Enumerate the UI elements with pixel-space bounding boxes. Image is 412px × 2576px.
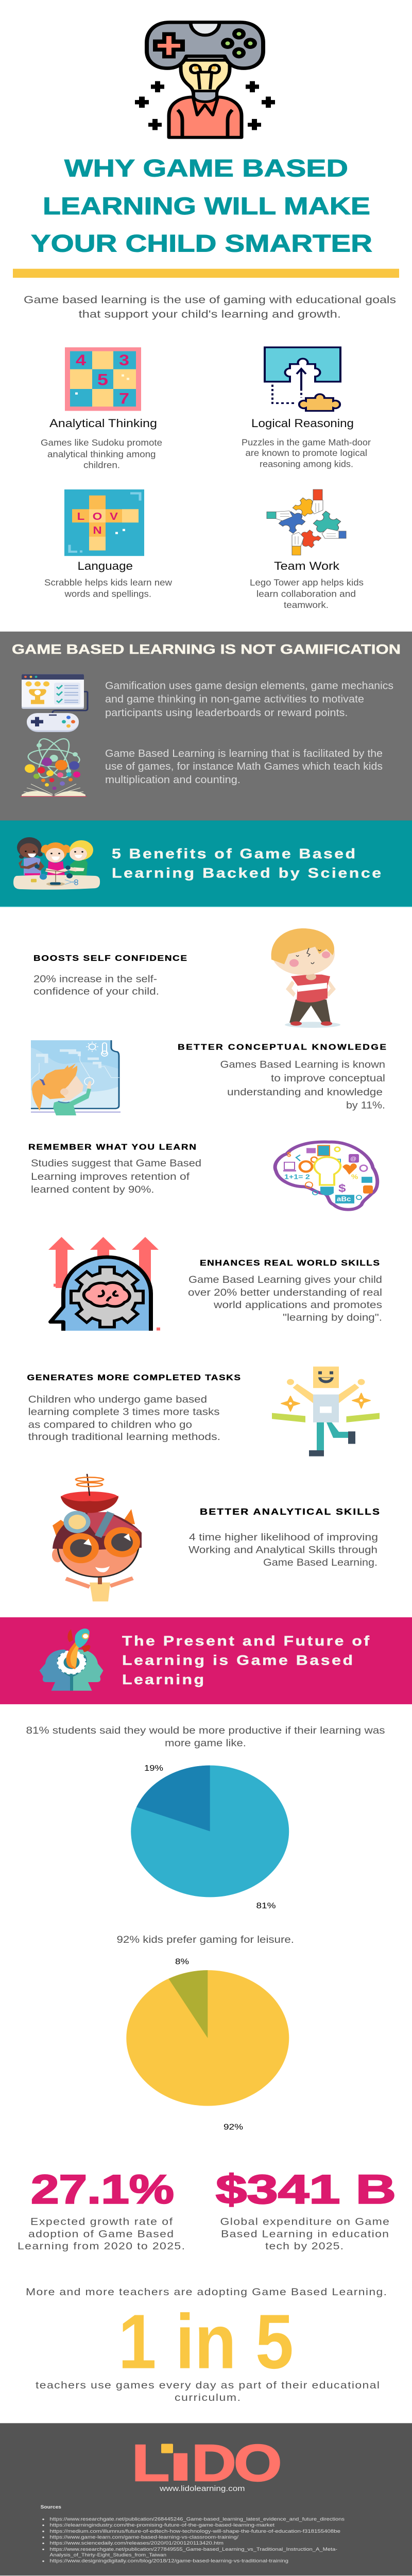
- icon: scrabble board: [64, 489, 144, 556]
- illustration: kid with goggles and propeller hat: [52, 1474, 142, 1601]
- sources list: https://www.researchgate.net/publication/277849555_Game-based_Learning_vs_Traditional_Instruction_A_Meta-: [49, 2547, 337, 2552]
- icon: atom over open book: [21, 735, 87, 797]
- illustration: confident boy: [271, 928, 340, 1028]
- icon: controller-headed lightbulb person: [135, 22, 275, 138]
- banner heading: [122, 1634, 369, 1688]
- benefit: boosts self confidence: [33, 928, 340, 1028]
- game based learning description: [105, 748, 383, 786]
- pie chart: 92 / 8: 92%: [224, 2123, 243, 2131]
- skill: analytical thinking: [41, 347, 162, 470]
- logo: LiDO: O: [234, 2434, 282, 2492]
- icon: scrabble board: N: [93, 524, 102, 536]
- skill: team work: Lego Tower app helps kids: [250, 578, 364, 588]
- skill: logical reasoning: Logical Reasoning: [251, 417, 354, 430]
- benefit: generates more completed tasks: GENERATES MORE COMPLETED TASKS: [27, 1373, 241, 1382]
- logo: LiDO: D: [192, 2434, 236, 2492]
- icon: scrabble board: V: [110, 511, 118, 522]
- title: [31, 155, 372, 257]
- benefit: generates more completed tasks: learning complete 3 times more tasks: [28, 1406, 220, 1417]
- intro text: that support your child's learning and growth.: [79, 309, 341, 320]
- icon: sudoku grid: 3: [119, 352, 129, 369]
- stat: global expenditure: [216, 2166, 396, 2252]
- illustration: brain of icons: [275, 1142, 377, 1210]
- intro text: Game based learning is the use of gaming with educational goals: [24, 294, 396, 306]
- panel: future of learning banner: [0, 1617, 412, 1704]
- stat: global expenditure: Based Learning in education: [221, 2229, 389, 2240]
- skill: team work: [250, 489, 364, 611]
- illustration: brain of icons: 1+1= 2: [284, 1173, 310, 1181]
- benefit: boosts self confidence: confidence of your child.: [33, 986, 159, 997]
- skill: logical reasoning: are known to promote logical: [245, 448, 367, 459]
- text: productivity statistic: more game like.: [165, 1738, 246, 1749]
- text: productivity statistic: [26, 1725, 385, 1749]
- benefit: generates more completed tasks: [27, 1366, 380, 1456]
- benefit: boosts self confidence: BOOSTS SELF CONFIDENCE: [33, 954, 187, 963]
- benefit: remember what you learn: [28, 1142, 377, 1210]
- text: teachers use games: curriculum.: [175, 2393, 241, 2403]
- skill: logical reasoning: reasoning among kids.: [260, 459, 353, 469]
- illustration: brain of icons: aBc: [337, 1196, 351, 1202]
- banner heading: Learning is Game Based: [122, 1653, 353, 1668]
- banner heading: The Present and Future of: [122, 1634, 369, 1649]
- text: productivity statistic: 81% students said they would be more productive if their learning was: [26, 1725, 385, 1736]
- benefit: better conceptual knowledge: BETTER CONCEPTUAL KNOWLEDGE: [178, 1042, 386, 1052]
- stat: global expenditure: Global expenditure on Game: [220, 2216, 389, 2227]
- benefit: enhances real world skills: "learning by doing".: [283, 1312, 382, 1323]
- text: teachers use games: teachers use games every day as part of their educational: [36, 2380, 380, 2391]
- pie chart: 81 / 19: 19%: [144, 1764, 163, 1773]
- game based learning description: multiplication and counting.: [105, 774, 241, 786]
- pie chart: 92 / 8: [126, 1957, 289, 2131]
- intro text: [24, 294, 396, 320]
- logo: LiDO: L: [132, 2434, 169, 2492]
- icon: puzzle door: [265, 347, 340, 411]
- illustration: head with gear and rising arrows: [48, 1237, 160, 1331]
- icon: scrabble board: O: [93, 511, 102, 522]
- benefit: better conceptual knowledge: [31, 1040, 386, 1115]
- skill: logical reasoning: Puzzles in the game Math-door: [242, 437, 371, 448]
- benefit: better analytical skills: [52, 1474, 380, 1601]
- stat: growth rate: adoption of Game Based: [28, 2229, 174, 2240]
- skill: logical reasoning: [242, 347, 371, 469]
- panel: footer: [0, 2423, 412, 2575]
- panel: benefits banner: [0, 820, 412, 907]
- stat: growth rate: [18, 2166, 185, 2252]
- website url: www.lidolearning.com: [159, 2484, 245, 2493]
- illustration: happy block figure: [272, 1366, 380, 1456]
- benefit: better analytical skills: 4 time higher likelihood of improving: [189, 1532, 378, 1543]
- benefit: enhances real world skills: [48, 1237, 382, 1331]
- skill: language: Scrabble helps kids learn new: [44, 578, 173, 588]
- gamification description: and game thinking in non-game activities to motivate: [105, 693, 364, 705]
- benefit: better conceptual knowledge: by 11%.: [346, 1100, 385, 1111]
- logo: LiDO: [132, 2434, 282, 2492]
- skill: analytical thinking: Games like Sudoku promote: [41, 438, 162, 448]
- yellow divider bar: [13, 269, 399, 278]
- benefit: generates more completed tasks: through traditional learning methods.: [28, 1432, 220, 1443]
- stat: growth rate: 27.1%: [31, 2166, 174, 2212]
- gamification description: participants using leaderboards or reward points.: [105, 707, 348, 719]
- sources list: https://www.sciencedaily.com/releases/2020/01/200120113420.htm: [49, 2541, 224, 2546]
- illustration: girl at touch screen: [31, 1040, 121, 1115]
- benefit: better analytical skills: Game Based Learning.: [263, 1557, 377, 1568]
- illustration: brain of icons: $: [287, 1151, 291, 1158]
- benefit: enhances real world skills: Game Based Learning gives your child: [188, 1275, 382, 1285]
- benefit: enhances real world skills: over 20% better understanding of real: [188, 1287, 382, 1298]
- benefit: generates more completed tasks: Children who undergo game based: [28, 1394, 207, 1405]
- stat: growth rate: Learning from 2020 to 2025.: [18, 2241, 185, 2252]
- text: teachers adopting: More and more teachers are adopting Game Based Learning.: [26, 2287, 387, 2298]
- stat: global expenditure: tech by 2025.: [265, 2241, 344, 2252]
- benefit: generates more completed tasks: as compared to children who go: [28, 1419, 192, 1430]
- skill: language: words and spellings.: [64, 589, 151, 599]
- stat: global expenditure: $341 B: [216, 2166, 396, 2212]
- game based learning description: Game Based Learning is learning that is facilitated by the: [105, 748, 383, 759]
- benefit: remember what you learn: learned content by 90%.: [31, 1184, 154, 1195]
- banner heading: [112, 846, 381, 881]
- skill: language: Language: [77, 560, 133, 572]
- benefit: remember what you learn: Studies suggest that Game Based: [31, 1158, 201, 1169]
- skill: language: [44, 489, 173, 599]
- game based learning description: use of games, for instance Math Games which teach kids: [105, 760, 383, 772]
- icon: scrabble board: L: [77, 511, 84, 522]
- stat: growth rate: Expected growth rate of: [30, 2216, 173, 2227]
- sources list: [41, 2504, 345, 2564]
- title: LEARNING WILL MAKE: [43, 193, 370, 220]
- title: WHY GAME BASED: [64, 155, 348, 182]
- benefit: enhances real world skills: ENHANCES REAL WORLD SKILLS: [200, 1258, 380, 1267]
- icon: sudoku grid: 5: [97, 370, 108, 389]
- sources list: https://www.designingdigitally.com/blog/2018/12/game-based-learning-vs-traditional-training: [49, 2559, 288, 2564]
- skill: team work: Team Work: [274, 560, 340, 572]
- pie chart: 81 / 19: [131, 1764, 289, 1910]
- pie chart: 81 / 19: 81%: [256, 1902, 276, 1910]
- sources list: Analysis_of_Thirty-Eight_Studies_from_Taiwan: [49, 2553, 166, 2558]
- benefit: enhances real world skills: world applications and promotes: [213, 1300, 382, 1311]
- banner heading: Learning: [122, 1672, 204, 1688]
- benefit: boosts self confidence: 20% increase in the self-: [33, 974, 157, 985]
- stat: one in five: 1 in 5: [118, 2299, 294, 2385]
- sources list: https://www.researchgate.net/publication/268445246_Game-based_learning_latest_evidence_and_future_directions: [49, 2517, 345, 2522]
- title: YOUR CHILD SMARTER: [31, 230, 372, 257]
- benefit: remember what you learn: Learning improves retention of: [31, 1172, 190, 1182]
- benefit: better analytical skills: Working and Analytical Skills through: [188, 1545, 377, 1555]
- text: teachers use games: [36, 2380, 380, 2403]
- banner heading: Learning Backed by Science: [112, 866, 381, 881]
- benefit: better conceptual knowledge: Games Based Learning is known: [220, 1059, 385, 1070]
- icon: leaderboard window and controller: [22, 674, 88, 732]
- illustration: brain of icons: @: [350, 1156, 356, 1162]
- gamification description: [105, 680, 393, 719]
- illustration: brain of icons: %: [351, 1173, 358, 1180]
- benefit: better conceptual knowledge: understanding and knowledge: [227, 1087, 383, 1097]
- panel: not gamification: [0, 632, 412, 820]
- skill: team work: learn collaboration and: [256, 589, 356, 599]
- benefit: better analytical skills: BETTER ANALYTICAL SKILLS: [200, 1507, 380, 1517]
- benefit: better conceptual knowledge: to improve conceptual: [271, 1073, 385, 1084]
- pie chart: 92 / 8: 8%: [175, 1957, 189, 1966]
- benefit: remember what you learn: REMEMBER WHAT YOU LEARN: [28, 1142, 196, 1151]
- skill: analytical thinking: analytical thinking among: [47, 449, 156, 460]
- sources list: Sources: [41, 2504, 61, 2510]
- icon: sudoku grid: 4: [76, 352, 87, 369]
- skill: team work: teamwork.: [284, 600, 329, 611]
- banner heading: 5 Benefits of Game Based: [112, 846, 355, 861]
- panel heading: GAME BASED LEARNING IS NOT GAMIFICATION: [12, 642, 401, 657]
- sources list: https://medium.com/illumnus/future-of-edtech-how-technology-will-shape-the-future-of-education-f318155408be: [49, 2529, 340, 2534]
- text: leisure statistic: 92% kids prefer gaming for leisure.: [116, 1935, 294, 1945]
- sources list: https://elearningindustry.com/the-promising-future-of-the-game-based-learning-market: [49, 2523, 274, 2528]
- icon: rocket launching from two heads: [39, 1627, 103, 1691]
- illustration: brain of icons: $: [338, 1182, 346, 1195]
- skill: analytical thinking: Analytical Thinking: [49, 417, 157, 430]
- icon: sudoku grid: 7: [119, 390, 129, 408]
- sources list: https://www.game-learn.com/game-based-learning-vs-classroom-training/: [49, 2535, 238, 2540]
- icon: hands with puzzle pieces: [267, 489, 346, 555]
- skill: analytical thinking: children.: [83, 460, 120, 470]
- icon: sudoku grid: [65, 347, 141, 411]
- illustration: three kids at a table: [13, 837, 100, 890]
